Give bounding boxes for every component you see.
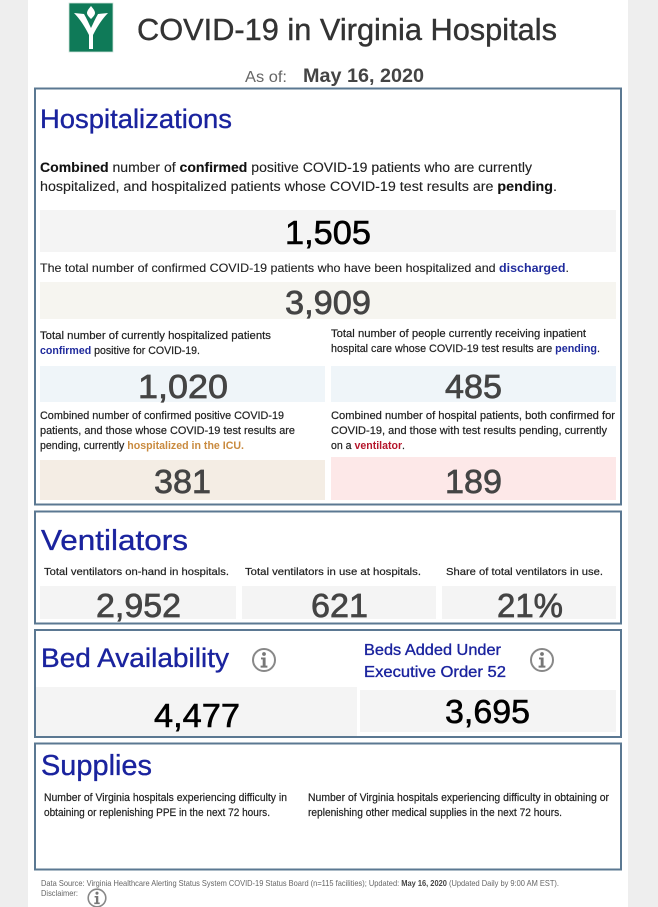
footer: data source: Data Source: Virginia Healthcare Alerting Status System COVID-19 Status Board (n=115 facilities); Updated: May 16, 2020 (Updated Daily by 9:00 AM EST). [41,878,559,888]
heading: ventilators: Ventilators [41,525,188,557]
stat: 189 ventilator [331,457,616,500]
stat: ventilators on hand [40,566,236,624]
as-of date: May 16, 2020 [303,66,424,87]
heading: supplies: Supplies [41,750,152,782]
panel border [35,512,621,624]
icon: bed availability info [253,649,275,671]
stat: 4,477 beds: 4,477 [154,697,240,734]
stat: ventilators in use: Total ventilators in use at hospitals. [245,566,421,578]
description: other supplies: Number of Virginia hospitals experiencing difficulty in obtaining or [308,792,609,804]
description: confirmed: Total number of currently hospitalized patients [40,330,272,342]
stat: 1,020 confirmed [40,366,325,405]
as-of date: As of: [245,69,287,86]
stat: 189 ventilator: 189 [445,463,502,500]
heading: beds added [364,642,506,681]
heading: beds added: Beds Added Under [364,642,502,659]
description: ventilator [331,410,615,452]
stat: 485 pending [331,366,616,405]
intro text: Combined number of confirmed positive COVID-19 patients who are currently [40,160,532,175]
stat: ventilators in use: 621 [311,587,368,624]
description: ICU: Combined number of confirmed positive COVID-19 [40,410,284,422]
stat: 3,695 beds added [360,690,616,732]
stat: share of ventilators: Share of total ventilators in use. [446,566,603,578]
icon: beds added info [531,649,553,671]
description: confirmed [40,330,272,357]
description: pending: Total number of people currently receiving inpatient [331,328,586,340]
stat: 1,020 confirmed: 1,020 [138,368,228,405]
description: discharged: The total number of confirmed COVID-19 patients who have been hospitalized and discharged. [40,261,569,275]
description: pending: hospital care whose COVID-19 test results are pending. [331,343,600,355]
description: ICU: patients, and those whose COVID-19 test results are [40,425,295,437]
stat: 381 ICU [40,460,325,500]
stat: share of ventilators [442,566,616,624]
description: ventilator: COVID-19, and those with test results pending, currently [331,425,607,437]
description: PPE: Number of Virginia hospitals experiencing difficulty in [44,792,287,804]
description: ventilator: Combined number of hospital patients, both confirmed for [331,410,615,422]
stat: 485 pending: 485 [445,368,502,405]
description: PPE: obtaining or replenishing PPE in the next 72 hours. [44,807,270,819]
panel border [35,744,621,870]
description: confirmed: confirmed positive for COVID-19. [40,345,200,357]
stat: 3,909 discharged [40,282,616,321]
stat: ventilators on hand: 2,952 [96,587,181,624]
description: PPE [44,792,287,819]
stat: ventilators on hand: Total ventilators on-hand in hospitals. [44,566,229,578]
stat: 4,477 beds [36,687,357,736]
panel: bed availability [35,630,621,737]
footer: disclaimer: Disclaimer: [41,888,78,898]
description: other supplies: replenishing other medical supplies in the next 72 hours. [308,807,562,819]
heading: bed availability: Bed Availability [41,643,230,673]
stat: 3,909 discharged: 3,909 [285,284,371,321]
stat: share of ventilators: 21% [497,587,563,624]
stat: 3,695 beds added: 3,695 [445,693,530,730]
as-of date [245,66,424,87]
description: ICU [40,410,295,452]
panel border [35,630,621,737]
description: pending [331,328,600,355]
icon: disclaimer info [88,889,106,907]
heading: beds added: Executive Order 52 [364,664,506,681]
panel: supplies [35,744,621,870]
intro text [40,160,557,194]
title: COVID-19 in Virginia Hospitals [137,12,557,47]
stat: 1,505 hospitalized [40,210,616,252]
stat: 381 ICU: 381 [154,463,211,500]
description: ICU: pending, currently hospitalized in the ICU. [40,440,244,452]
logo: Virginia hospital association [69,3,113,52]
heading: hospitalizations: Hospitalizations [40,104,232,134]
panel border [35,88,621,504]
description: other supplies [308,792,609,819]
stat: ventilators in use [242,566,436,624]
intro text: hospitalized, and hospitalized patients whose COVID-19 test results are pending. [40,179,557,194]
panel: hospitalizations [35,88,621,504]
description: ventilator: on a ventilator. [331,440,405,452]
stat: 1,505 hospitalized: 1,505 [285,214,371,251]
panel: ventilators [35,512,621,624]
